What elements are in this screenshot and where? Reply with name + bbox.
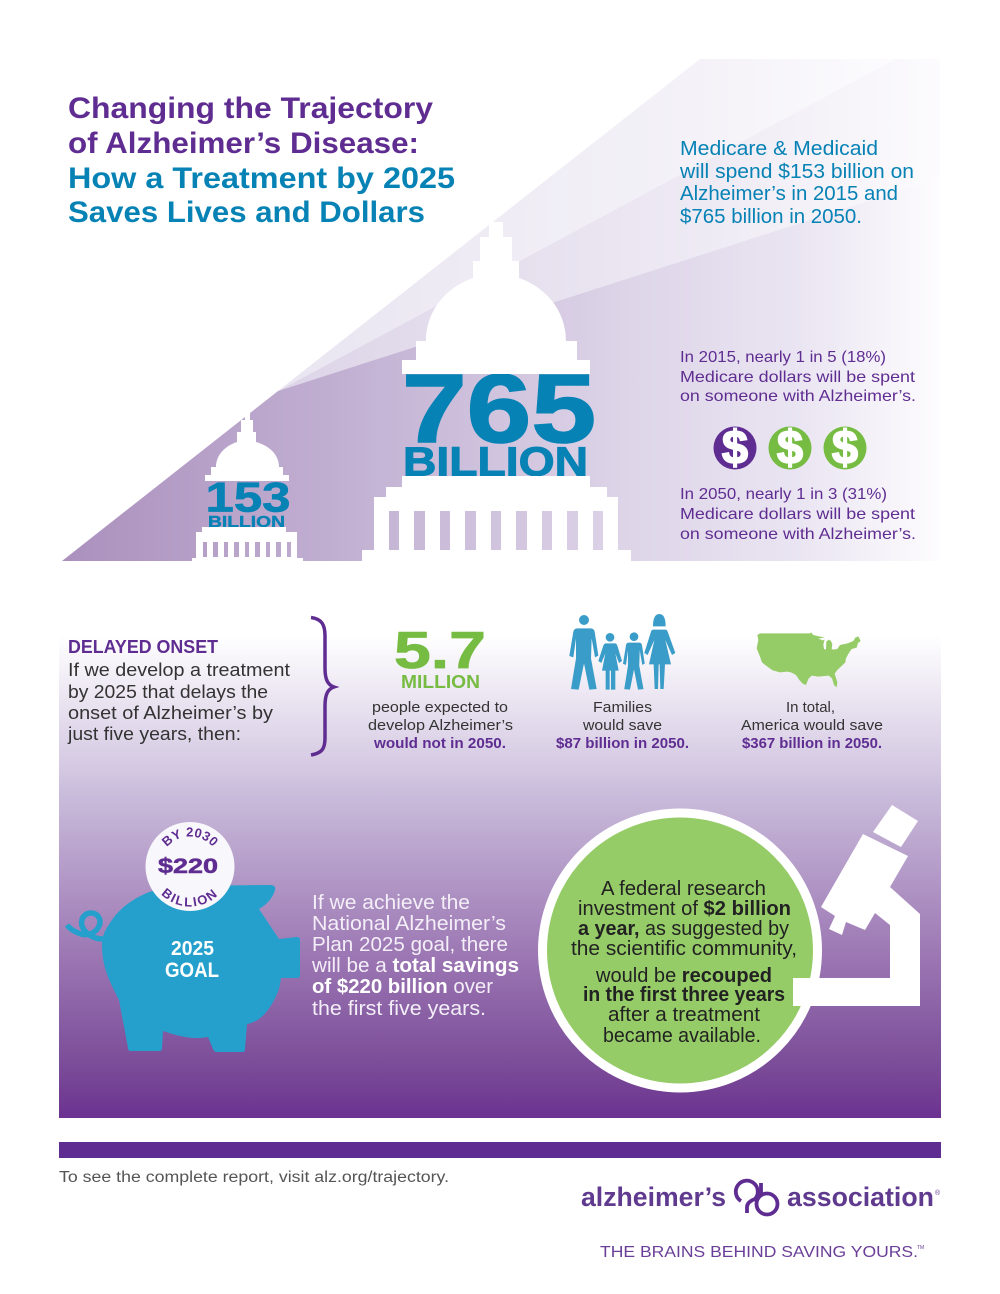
text: national plan savings: will be a total savings	[311, 955, 519, 977]
coin: $220 billion by 2030: BILLION	[162, 888, 217, 907]
text: 2015 share of Medicare dollars	[680, 349, 916, 405]
icon: family	[569, 614, 675, 690]
text: Medicare and Medicaid spending: will spend $153 billion on	[679, 160, 914, 183]
figure: 153 billion: 153	[206, 474, 290, 520]
callout: federal research investment: investment of $2 billion	[578, 898, 791, 920]
text: family savings: $87 billion in 2050.	[556, 736, 689, 752]
brace	[311, 618, 334, 755]
text: 2050 share of Medicare dollars: In 2050, nearly 1 in 3 (31%)	[680, 486, 887, 503]
paragraph: delayed onset: If we develop a treatment	[68, 660, 290, 680]
title: Saves Lives and Dollars	[68, 196, 425, 229]
text: Medicare and Medicaid spending: Medicare & Medicaid	[680, 137, 878, 160]
text: national plan savings: National Alzheimer’s	[312, 913, 506, 935]
text: America savings: In total,	[786, 700, 835, 716]
callout: federal research investment: would be recouped	[595, 965, 772, 987]
tagline: TM	[917, 1245, 924, 1251]
stat: 5.7 million: people expected to	[372, 700, 508, 716]
icon: three dollar coins: $	[722, 420, 748, 474]
callout: federal research investment: after a treatment	[608, 1004, 760, 1026]
text: 2015 share of Medicare dollars: In 2015, nearly 1 in 5 (18%)	[680, 349, 886, 366]
stat: 5.7 million	[368, 622, 513, 752]
text: national plan savings	[311, 892, 519, 1020]
stat: 5.7 million: would not in 2050.	[373, 736, 506, 752]
figure: 765 billion: BILLION	[403, 438, 588, 484]
heading: delayed onset: DELAYED ONSET	[68, 637, 218, 657]
icon: three dollar coins: $	[832, 420, 858, 474]
paragraph: delayed onset: by 2025 that delays the	[68, 682, 268, 702]
logo: Alzheimer's Association: alzheimer’s	[581, 1182, 726, 1212]
paragraph: delayed onset: just five years, then:	[67, 724, 241, 744]
icon: three dollar coins: $	[777, 420, 803, 474]
text: America savings	[741, 700, 883, 752]
figure: 765 billion: 765	[402, 354, 596, 463]
text: national plan savings: Plan 2025 goal, there	[312, 934, 508, 956]
text: Medicare and Medicaid spending: Alzheimer’s in 2015 and	[680, 182, 898, 205]
icon: piggy bank	[67, 885, 300, 1052]
callout: federal research investment: A federal research	[601, 878, 766, 900]
label: 2025 goal	[165, 938, 219, 982]
paragraph: delayed onset	[67, 660, 290, 744]
footer bar	[59, 1142, 941, 1158]
text: 2050 share of Medicare dollars	[680, 486, 916, 543]
icon: small capitol, 2015	[192, 413, 303, 561]
icon: United States map	[757, 632, 861, 687]
text: Medicare and Medicaid spending	[679, 137, 914, 228]
text: family savings: Families	[593, 700, 652, 716]
text: America savings: $367 billion in 2050.	[742, 736, 882, 752]
logo: Alzheimer's Association	[581, 1181, 941, 1214]
callout: federal research investment: the scientific community,	[571, 938, 797, 960]
icon: microscope	[793, 805, 920, 1006]
coin: $220 billion by 2030: $220	[158, 855, 218, 878]
callout: federal research investment: in the first three years	[583, 984, 785, 1006]
text: report link: To see the complete report, visit alz.org/trajectory.	[59, 1169, 449, 1186]
title: of Alzheimer’s Disease:	[68, 127, 419, 160]
text: family savings	[556, 700, 689, 752]
tagline: THE BRAINS BEHIND SAVING YOURS.	[600, 1244, 918, 1261]
title: Changing the Trajectory	[68, 92, 433, 125]
text: national plan savings: If we achieve the	[312, 892, 470, 914]
paragraph: delayed onset: onset of Alzheimer’s by	[68, 703, 273, 723]
text: family savings: would save	[582, 718, 662, 734]
title	[68, 92, 455, 229]
callout: federal research investment: a year, as suggested by	[578, 918, 789, 940]
text: delayed onset	[67, 637, 290, 744]
figure: 765 billion	[402, 354, 596, 484]
callout: federal research investment	[542, 813, 818, 1088]
text: America savings: America would save	[741, 718, 883, 734]
text: 2015 share of Medicare dollars: on someone with Alzheimer’s.	[680, 388, 916, 405]
stat: 5.7 million: MILLION	[401, 671, 480, 692]
stat: 5.7 million: develop Alzheimer’s	[368, 718, 513, 734]
figure: 153 billion	[206, 474, 290, 531]
text: Medicare and Medicaid spending: $765 billion in 2050.	[680, 205, 862, 228]
logo: Alzheimer's Association: ®	[935, 1189, 941, 1197]
text: 2050 share of Medicare dollars: on someone with Alzheimer’s.	[680, 526, 916, 543]
panel: delayed onset and goal background	[59, 620, 941, 1118]
coin: $220 billion by 2030: BY 2030	[162, 827, 218, 846]
text: 2015 share of Medicare dollars: Medicare dollars will be spent	[680, 369, 916, 386]
label: 2025 goal: 2025	[171, 938, 214, 960]
text: 2050 share of Medicare dollars: Medicare dollars will be spent	[680, 506, 916, 523]
icon: brain loops	[736, 1181, 778, 1214]
coin: $220 billion by 2030	[146, 822, 234, 911]
icon: three dollar coins	[714, 420, 866, 474]
logo: Alzheimer's Association: association	[787, 1182, 934, 1212]
text: national plan savings: the first five years.	[312, 998, 486, 1020]
title: How a Treatment by 2025	[68, 162, 455, 195]
label: 2025 goal: GOAL	[165, 959, 219, 982]
background: rising cost fan	[62, 59, 940, 561]
figure: 153 billion: BILLION	[208, 514, 285, 531]
icon: large capitol, 2050	[362, 222, 631, 561]
callout: federal research investment: became available.	[603, 1025, 761, 1047]
stat: 5.7 million: 5.7	[394, 622, 486, 680]
text: national plan savings: of $220 billion over	[312, 976, 493, 998]
